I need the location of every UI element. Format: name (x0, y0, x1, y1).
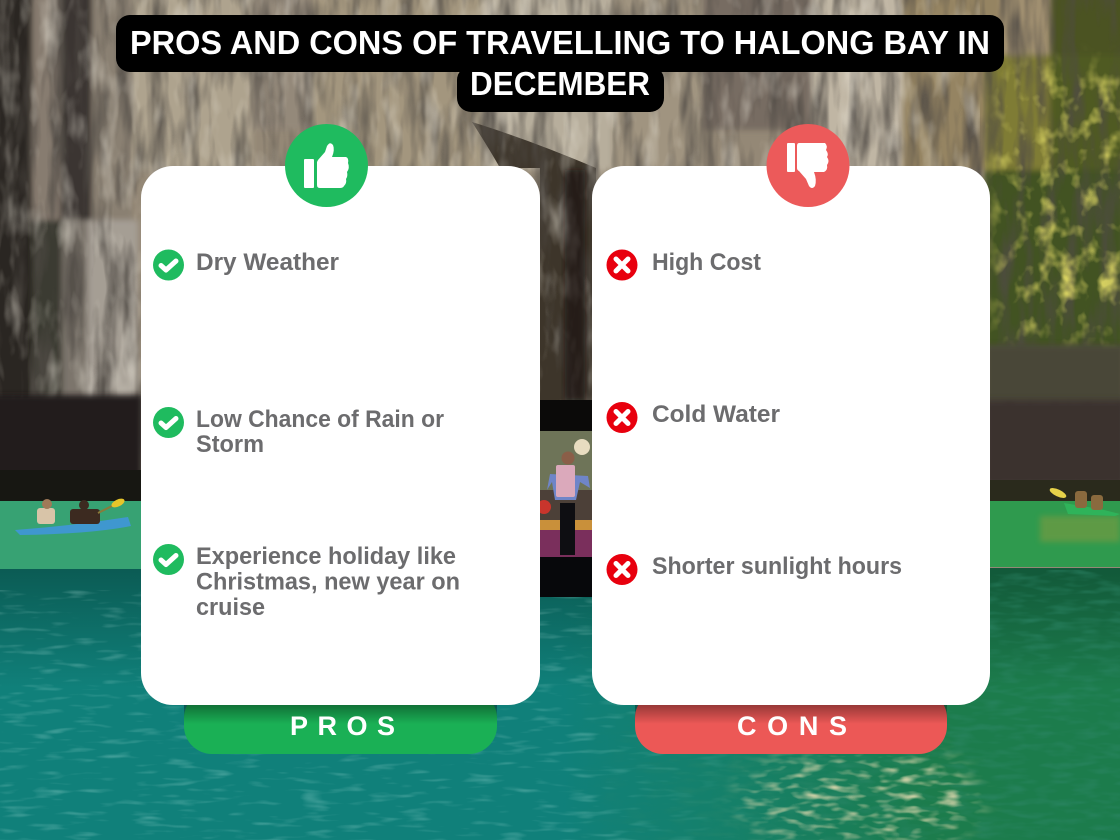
pros label tab: PROS (290, 711, 395, 741)
cave opening and arch between cards (472, 122, 596, 440)
pros item: holidays on cruise: cruise (196, 594, 265, 621)
cons item: high cost (606, 249, 761, 280)
title text line 1: PROS AND CONS OF TRAVELLING TO HALONG BAY IN (130, 24, 990, 61)
pros item: holidays on cruise (153, 543, 460, 621)
pros item: low chance of rain: Storm (196, 431, 264, 458)
right kayak (1048, 486, 1120, 516)
pros item: holidays on cruise: Experience holiday like (196, 543, 456, 570)
panel: cons (592, 124, 990, 705)
left kayak (15, 497, 131, 535)
pros label tab (184, 690, 497, 754)
panel: pros (141, 124, 540, 705)
title text line 2: DECEMBER (470, 65, 650, 102)
pros item: holidays on cruise: Christmas, new year on (196, 568, 460, 596)
cons item: high cost: High Cost (652, 249, 761, 276)
cons item: cold water: Cold Water (652, 401, 780, 428)
cons label tab: CONS (737, 711, 847, 741)
icon: thumbs down (766, 124, 850, 207)
cons item: shorter sunlight hours: Shorter sunlight hours (652, 553, 902, 580)
pros item: dry weather (153, 249, 339, 280)
pros item: low chance of rain: Low Chance of Rain or (196, 406, 444, 433)
water (0, 568, 1120, 840)
icon: thumbs up (285, 124, 368, 207)
pros item: dry weather: Dry Weather (196, 249, 339, 276)
title banner (116, 15, 1004, 112)
boat with people, between cards (537, 431, 592, 597)
pros item: low chance of rain (153, 406, 444, 458)
cons item: cold water (606, 401, 780, 433)
cons item: shorter sunlight hours (606, 553, 902, 585)
cons label tab (635, 690, 947, 754)
